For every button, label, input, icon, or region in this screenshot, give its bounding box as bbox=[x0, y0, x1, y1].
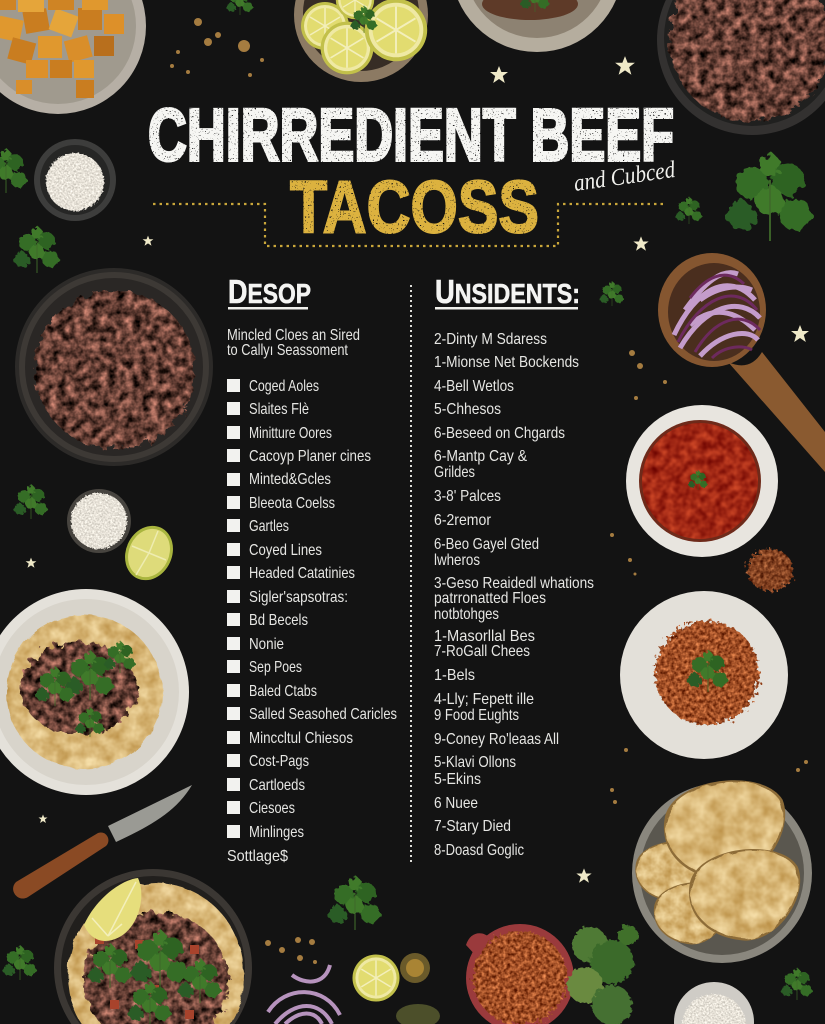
checklist: Cost-Pags bbox=[249, 753, 309, 770]
ingredient list: 3-Geso Reaidedl whations bbox=[434, 575, 594, 592]
plate: ground spice and herb bbox=[620, 591, 788, 759]
knife bbox=[13, 785, 192, 899]
checklist: Ciesoes bbox=[249, 800, 295, 817]
bottom ingredients bbox=[268, 924, 754, 1024]
ingredient list: 4-Bell Wetlos bbox=[434, 378, 514, 395]
checklist: Headed Catatinies bbox=[249, 565, 355, 582]
checklist: Slaites Flè bbox=[249, 401, 309, 418]
ingredient list: 1-Masorllal Bes bbox=[434, 628, 535, 645]
checklist: Minlinges bbox=[249, 824, 304, 841]
ingredient list: 5-Ekins bbox=[434, 771, 481, 788]
heading: desop: DESOP bbox=[228, 273, 311, 310]
ingredient list: 5-Chhesos bbox=[434, 401, 501, 418]
scattered spices bbox=[170, 18, 808, 964]
intro text: to Callyı Seassoment bbox=[227, 342, 348, 359]
checklist: Bd Becels bbox=[249, 612, 308, 629]
plate: tortillas bbox=[632, 780, 812, 963]
small bowl: grated cheese bbox=[34, 139, 116, 221]
intro text: Mincled Cloes an Sired bbox=[227, 327, 360, 344]
plate: top taco bbox=[451, 0, 623, 52]
footer note: Sottlage$ bbox=[227, 848, 288, 865]
center divider bbox=[410, 285, 412, 862]
checklist: Sep Poes bbox=[249, 659, 302, 676]
checklist: Cacoyp Planer cines bbox=[249, 448, 371, 465]
ingredient list: notbtohges bbox=[434, 606, 499, 623]
ingredient list: 6-Beseed on Chgards bbox=[434, 425, 565, 442]
ingredient list: 5-Klavi Ollons bbox=[434, 754, 516, 771]
ingredient list: 3-8' Palces bbox=[434, 488, 501, 505]
ingredient list: 6-Mantp Cay & bbox=[434, 448, 527, 465]
checklist: Bleeota Coelss bbox=[249, 495, 335, 512]
heading: unsidents: UNSIDENTS: bbox=[435, 273, 580, 310]
checklist: Cartloeds bbox=[249, 777, 305, 794]
ingredient list: patrronatted Floes bbox=[434, 590, 546, 607]
ingredient list: 9 Food Eughts bbox=[434, 707, 519, 724]
lime on taco bbox=[84, 878, 141, 941]
plate: beef taco bbox=[0, 589, 189, 795]
checklist: Salled Seasohed Caricles bbox=[249, 706, 397, 723]
small bowl: cheese bbox=[67, 489, 131, 553]
checklist: Coged Aoles bbox=[249, 378, 319, 395]
ingredient list: 6 Nuee bbox=[434, 795, 478, 812]
ingredient list: 2-Dinty M Sdaress bbox=[434, 331, 547, 348]
stars bbox=[26, 56, 809, 883]
checklist: Coyed Lines bbox=[249, 542, 322, 559]
ingredient list: 7-Stary Died bbox=[434, 818, 511, 835]
checklist: Minitture Oores bbox=[249, 425, 332, 442]
dotted title frame bbox=[153, 204, 665, 246]
plate: cubed potatoes bbox=[0, 0, 146, 114]
bowl: minced beef bbox=[15, 268, 213, 466]
spice heap bbox=[747, 549, 793, 591]
ingredient list: 6-Beo Gayel Gted bbox=[434, 536, 539, 553]
ingredient list: 1-Mionse Net Bockends bbox=[434, 354, 579, 371]
checklist: Nonie bbox=[249, 636, 284, 653]
checklist: Minccltul Chiesos bbox=[249, 730, 353, 747]
ingredient list: 6-2remor bbox=[434, 512, 492, 529]
panel: desop column bbox=[227, 273, 397, 865]
lime wedge bbox=[116, 518, 182, 588]
intro text bbox=[227, 327, 360, 359]
ingredient list bbox=[434, 331, 594, 859]
bowl: lime wedges bbox=[294, 0, 428, 82]
bowl: red salsa bbox=[626, 405, 778, 557]
checklist: Baled Ctabs bbox=[249, 683, 317, 700]
ingredient list: 4-Lly; Fepett ille bbox=[434, 691, 534, 708]
ingredient list: Grildes bbox=[434, 464, 475, 481]
red onion bbox=[268, 965, 340, 1024]
spoon with red onion bbox=[658, 253, 825, 472]
ingredient list: 1-Bels bbox=[434, 667, 475, 684]
checklist: Sigler'sapsotras: bbox=[249, 589, 348, 606]
bowl: shredded beef bbox=[657, 0, 825, 135]
ingredient list: 8-Doasd Goglic bbox=[434, 842, 524, 859]
subtitle: tacoss: TACOSS bbox=[290, 166, 539, 248]
ingredient list: lwheros bbox=[434, 552, 480, 569]
script note: and Cubced bbox=[572, 157, 678, 197]
ingredient list: 7-RoGall Chees bbox=[434, 643, 530, 660]
bowl: taco with toppings bbox=[54, 869, 252, 1024]
checklist: Gartles bbox=[249, 518, 289, 535]
ingredient list: 9-Coney Ro'leaas All bbox=[434, 731, 559, 748]
checklist: Minted&Gcles bbox=[249, 471, 331, 488]
checklist bbox=[227, 378, 397, 841]
panel: unsidents column bbox=[434, 273, 594, 859]
